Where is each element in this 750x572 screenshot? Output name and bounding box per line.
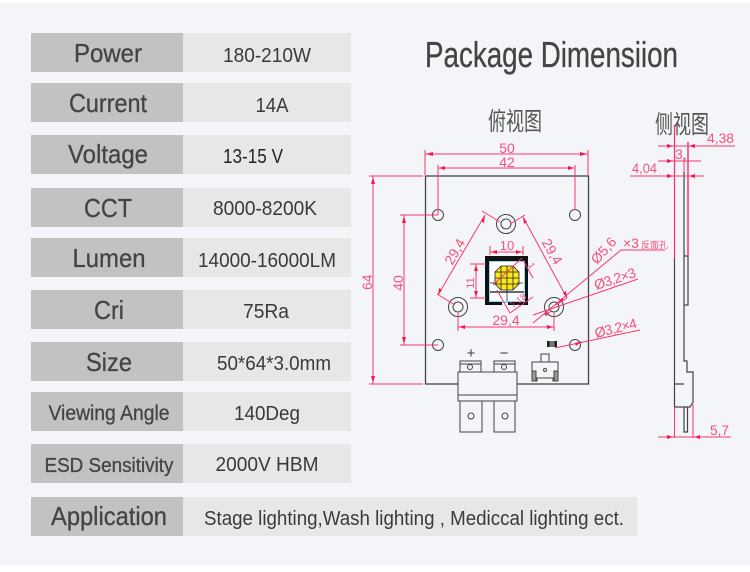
side dimension labels: 3, (675, 146, 687, 162)
dimension labels: 64 (359, 274, 375, 290)
row: current: 14A (256, 94, 289, 117)
row: cri (31, 290, 351, 329)
row: application: Stage lighting,Wash lighting , Mediccal lighting ect. (204, 508, 624, 530)
dimension labels: 42 (499, 154, 515, 170)
dimension labels: 1 (526, 261, 537, 270)
dimension labels: 10 (500, 238, 514, 253)
row: cct (31, 188, 351, 227)
row: size (31, 342, 351, 381)
row: current: Current (69, 88, 148, 118)
terminal marks (467, 341, 557, 362)
row: esd sensitivity: 2000V HBM (216, 453, 318, 476)
dimension labels: 11 (465, 277, 477, 289)
board outline (426, 176, 588, 384)
side view drawing (630, 125, 735, 439)
terminal marks: − (500, 345, 509, 362)
terminal marks: + (467, 345, 476, 362)
row: lumen: Lumen (72, 243, 146, 273)
dimension labels: 29,4 (492, 312, 520, 328)
row: application (31, 497, 637, 536)
row: power: Power (74, 38, 142, 68)
row: voltage (31, 135, 351, 174)
dimension labels: ×3 (623, 235, 639, 251)
side dimension labels: 5,7 (710, 422, 729, 438)
row: current (31, 83, 351, 122)
dimension labels: 29,4 (441, 236, 469, 267)
heading: top view: 俯视图 (488, 108, 542, 136)
dimension arrows (371, 152, 587, 383)
row: lumen (31, 238, 351, 277)
row: cri: 75Ra (243, 300, 290, 323)
title: Package Dimensiion (425, 34, 678, 75)
dimension labels: Ø3,2×4 (593, 315, 639, 341)
row: size: 50*64*3.0mm (217, 352, 331, 375)
dimension labels: 反面孔 (641, 240, 668, 250)
top view drawing (359, 140, 668, 432)
dimension labels: 29,4 (539, 236, 566, 267)
side arrows (667, 144, 700, 439)
side profile (674, 172, 693, 432)
row: size: Size (86, 347, 132, 377)
row: cct: 8000-8200K (213, 197, 317, 220)
row: voltage: Voltage (68, 139, 148, 169)
dimension labels: 7,18 (508, 291, 528, 310)
row: cct: CCT (84, 193, 132, 223)
dimension lines (369, 150, 665, 384)
row: esd sensitivity (31, 444, 351, 483)
row: lumen: 14000-16000LM (198, 249, 336, 272)
side dimension labels: 4,38 (707, 130, 734, 146)
dimension labels: Ø3,2×3 (592, 264, 638, 293)
row: power: 180-210W (223, 44, 312, 67)
side dimension lines (630, 125, 735, 438)
row: cri: Cri (94, 295, 124, 325)
heading: side view: 侧视图 (655, 111, 709, 139)
row: viewing angle (31, 392, 351, 431)
row: application: Application (51, 501, 167, 531)
row: esd sensitivity: ESD Sensitivity (44, 455, 174, 477)
row: viewing angle: 140Deg (234, 402, 300, 425)
dimension labels: Ø5,6 (587, 234, 620, 267)
screw holes (448, 214, 564, 316)
dimension labels (359, 140, 668, 341)
dimension labels: 40 (390, 275, 406, 291)
row: power (31, 33, 351, 72)
side dimension labels (632, 130, 734, 438)
side dimension labels: 4,04 (632, 160, 657, 176)
dimension labels: 50 (499, 140, 515, 156)
row: viewing angle: Viewing Angle (48, 402, 170, 425)
spec table (31, 33, 637, 536)
mounting holes (432, 210, 580, 350)
row: voltage: 13-15 V (223, 146, 284, 168)
connector (458, 361, 517, 432)
led chip (485, 256, 528, 305)
switch part (532, 354, 558, 381)
